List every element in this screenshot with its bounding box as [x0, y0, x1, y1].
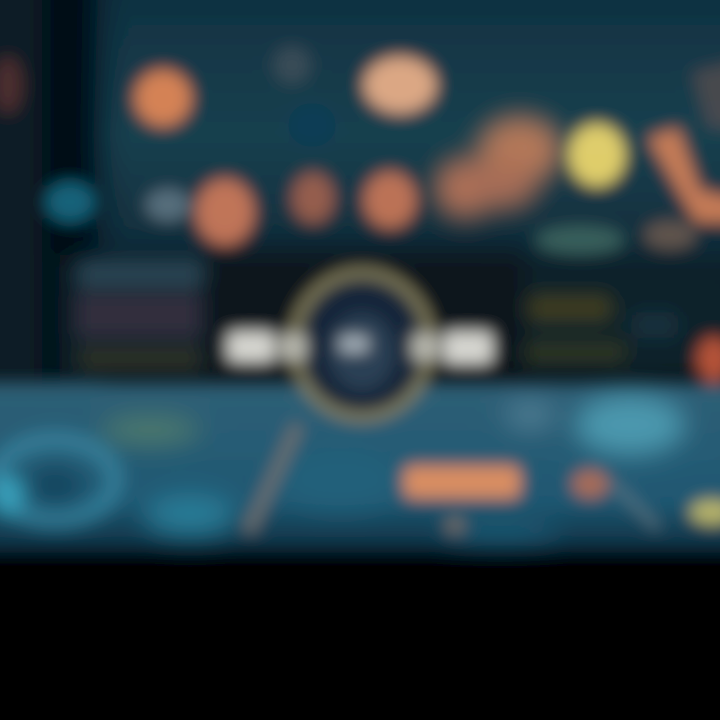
- panel: left sign block: [76, 262, 203, 370]
- icon: yellow light: [569, 124, 625, 186]
- icon: orange light centre: [364, 172, 416, 228]
- icon: orange right shape: [648, 58, 720, 222]
- arrow: right floor streak: [612, 482, 658, 528]
- callout: yellow corner mark: [690, 500, 720, 524]
- callout: orange floor label: [404, 466, 520, 498]
- icon: pale peach light: [364, 57, 436, 113]
- callout: small floor mark: [445, 516, 465, 534]
- icon: far left red glow: [0, 57, 22, 113]
- arrow: diagonal floor streak: [248, 425, 298, 532]
- emblem ring: [294, 273, 430, 417]
- emblem inner disc: [330, 314, 394, 390]
- icon: red block right: [697, 337, 720, 383]
- chart: floor highlights: [100, 395, 685, 542]
- icon: orange light mid-left: [196, 179, 254, 245]
- icon: teal light: [46, 182, 94, 222]
- panel: right sign block: [526, 295, 678, 362]
- icon: dim light top: [273, 46, 311, 84]
- icon: pale grey light: [146, 189, 190, 221]
- background: bottom fade: [0, 556, 720, 720]
- panel: dark middle band: [60, 250, 720, 382]
- icon: muted green glow: [536, 226, 624, 254]
- background: upper night sky: [0, 0, 720, 270]
- icon: central emblem: [228, 273, 492, 417]
- emblem text band: [228, 332, 492, 364]
- icon: left floor swirl: [0, 440, 115, 520]
- icon: muted orange light: [292, 173, 334, 223]
- icon: orange light left: [135, 70, 191, 126]
- panel: lower blue floor: [0, 384, 720, 552]
- callout: small orange floor label: [572, 470, 608, 498]
- panel: dark left column: [0, 0, 100, 390]
- icon: orange cloud: [435, 116, 562, 218]
- icon: dark blue disc: [288, 103, 336, 147]
- bokeh lights: [0, 46, 720, 383]
- icon: right muted glow: [644, 221, 696, 249]
